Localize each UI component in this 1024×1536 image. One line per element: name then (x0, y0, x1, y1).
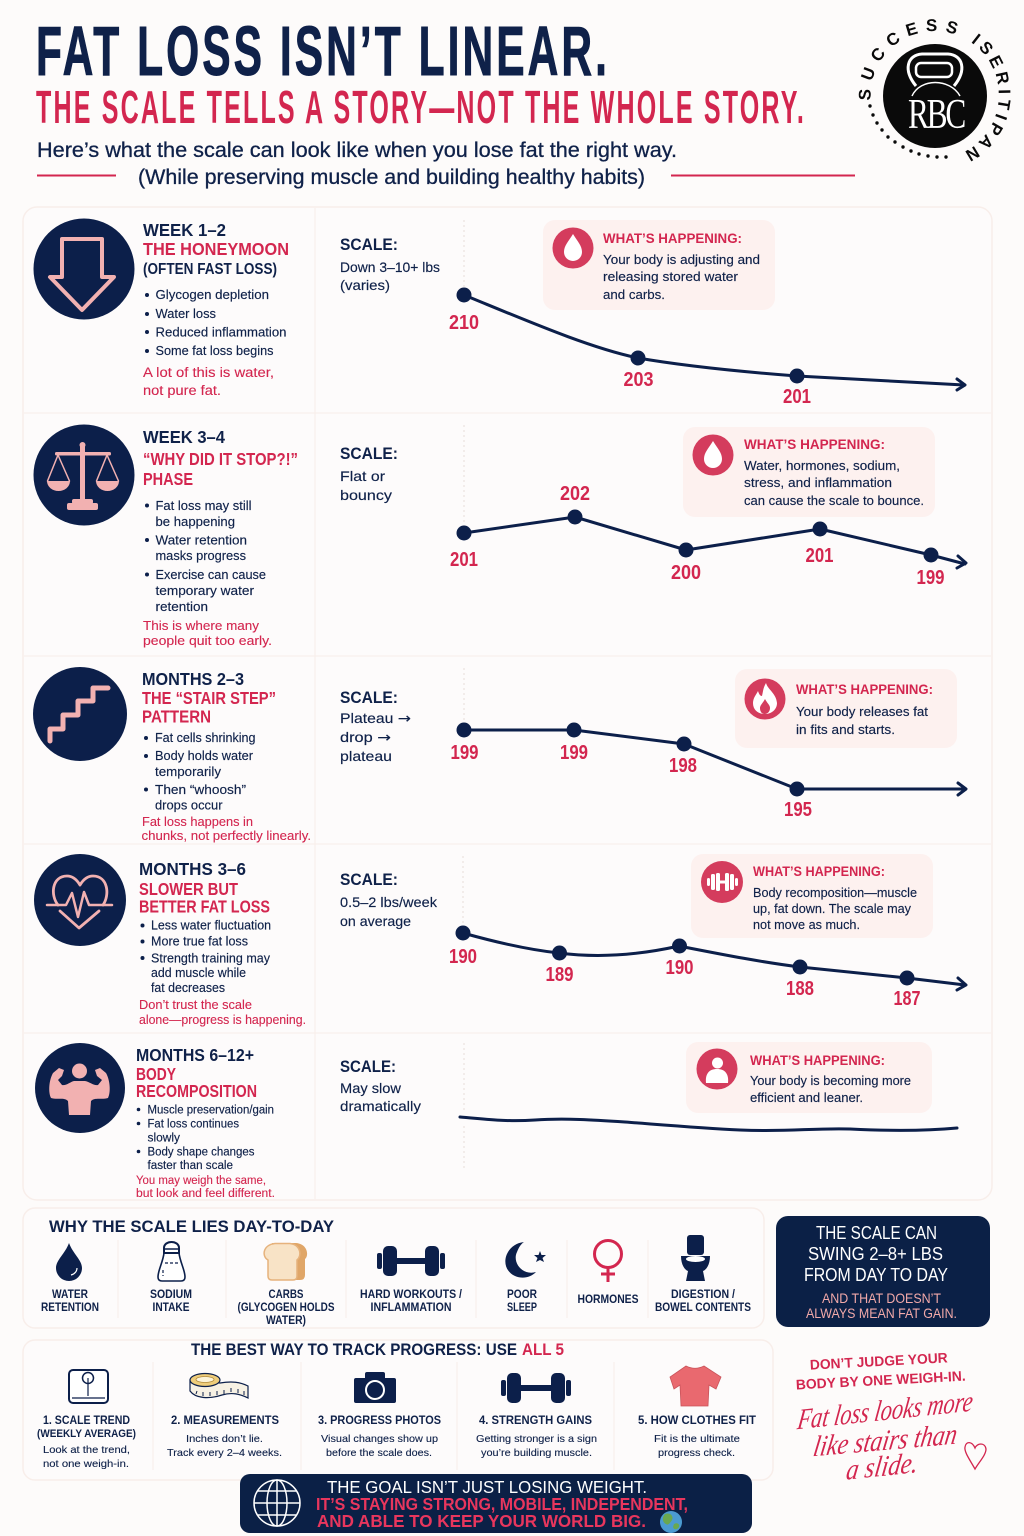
week 3-4 note: people quit too early. (143, 633, 272, 648)
months 6-12 bullets: slowly (148, 1132, 180, 1144)
item: measurements: Inches don’t lie. (186, 1433, 263, 1445)
scale label (340, 236, 440, 293)
item: scale trend (37, 1370, 136, 1470)
week 3-4 bullets: masks progress (156, 548, 246, 563)
item: scale trend: 1. SCALE TREND (43, 1415, 130, 1427)
months 3-6 note (139, 998, 306, 1027)
months 2-3 note: chunks, not perfectly linearly. (142, 829, 311, 843)
week 3-4 bullets (145, 498, 266, 614)
months 6-12 bullets: Fat loss continues (148, 1118, 239, 1130)
line chart: 190 to 187: 190 (449, 946, 477, 968)
item: how clothes fit: Fit is the ultimate (654, 1433, 740, 1445)
item: poor sleep: POOR (507, 1289, 538, 1301)
scale label (340, 445, 398, 503)
week 3-4 bullets: Exercise can cause (156, 567, 266, 582)
line chart: stair step 199 to 195 (450, 668, 966, 821)
callout: what's happening 4: Body recomposition—muscle (753, 885, 917, 900)
item: measurements: Track every 2–4 weeks. (167, 1447, 282, 1459)
week 3-4 bullets: Fat loss may still (156, 498, 252, 513)
line chart: bouncing 201 to 199: 199 (916, 567, 944, 589)
week 3-4 note (143, 618, 272, 648)
item: water retention (41, 1243, 99, 1314)
callout: what's happening 3: WHAT’S HAPPENING: (796, 682, 933, 697)
week 3-4 bullets: retention (156, 599, 208, 614)
callout: scale swing box: SWING 2–8+ LBS (808, 1243, 943, 1264)
callout: scale swing box: THE SCALE CAN (816, 1222, 937, 1243)
months 3-6 bullets: fat decreases (151, 980, 225, 995)
item: scale trend: (WEEKLY AVERAGE) (37, 1428, 136, 1440)
callout: what's happening 4 (691, 854, 933, 938)
months 6-12 bullets: Muscle preservation/gain (148, 1104, 274, 1116)
scale label: plateau (340, 748, 392, 764)
heading: why the scale lies: WHY THE SCALE LIES DAY-TO-DAY (49, 1217, 335, 1236)
week 1-2 note (143, 365, 274, 398)
item: water retention: WATER (52, 1289, 89, 1301)
week 1-2 bullets: Some fat loss begins (156, 343, 274, 358)
banner text: IT’S STAYING STRONG, MOBILE, INDEPENDENT, (316, 1494, 688, 1514)
months 2-3 heading (142, 669, 276, 726)
line chart: 190 to 187: 190 (666, 957, 694, 979)
scale label: Down 3–10+ lbs (340, 259, 440, 275)
months 6-12 bullets (137, 1104, 274, 1172)
line chart: 210 to 201 (449, 220, 965, 408)
handwritten note: DON’T JUDGE YOUR (809, 1349, 948, 1373)
months 3-6 note: alone—progress is happening. (139, 1013, 306, 1027)
line chart: 190 to 187 (449, 856, 966, 1010)
week 3-4 heading: WEEK 3–4 (143, 427, 225, 447)
scale label: SCALE: (340, 871, 398, 889)
item: water retention: RETENTION (41, 1302, 99, 1314)
line chart: 210 to 201: 201 (783, 386, 811, 408)
item: sodium intake: SODIUM (150, 1289, 192, 1301)
item: digestion: DIGESTION / (671, 1289, 736, 1301)
callout: what's happening 1: Your body is adjusting and (603, 252, 760, 267)
months 6-12 bullets: Body shape changes (148, 1146, 255, 1158)
line chart: 190 to 187: 188 (786, 978, 814, 1000)
line chart: bouncing 201 to 199: 201 (450, 549, 478, 571)
handwritten note: BODY BY ONE WEIGH-IN. (795, 1368, 966, 1392)
scale label (340, 1058, 421, 1114)
panel: timeline card (23, 207, 992, 1200)
item: carbs: CARBS (268, 1289, 304, 1301)
callout: what's happening 4: not move as much. (753, 917, 860, 932)
item: digestion (655, 1235, 751, 1314)
months 3-6 bullets: Strength training may (151, 950, 270, 966)
callout: what's happening 1: WHAT’S HAPPENING: (603, 231, 742, 246)
callout: what's happening 3 (735, 669, 957, 748)
item: measurements (167, 1374, 282, 1459)
item: progress photos (318, 1372, 441, 1459)
scale label (340, 871, 438, 929)
week 3-4 note: This is where many (143, 618, 260, 633)
week 3-4 heading: PHASE (143, 469, 193, 489)
callout: what's happening 1: and carbs. (603, 287, 665, 302)
handwritten note (795, 1349, 975, 1487)
goal banner (240, 1474, 752, 1533)
item: hard workouts (360, 1246, 463, 1314)
callout: scale swing box: FROM DAY TO DAY (804, 1264, 948, 1285)
handwritten note: a slide. (844, 1447, 920, 1487)
months 2-3 bullets: Fat cells shrinking (155, 730, 256, 745)
item: strength gains (476, 1373, 597, 1459)
week 1-2 bullets: Reduced inflammation (156, 324, 286, 340)
scale label: on average (340, 913, 411, 929)
week 1-2 note: A lot of this is water, (143, 365, 274, 380)
line chart: stair step 199 to 195: 195 (784, 799, 812, 821)
panel: week 1-2 (34, 218, 965, 408)
line chart: stair step 199 to 195: 199 (560, 742, 588, 764)
callout: what's happening 2: WHAT’S HAPPENING: (744, 437, 885, 452)
callout: what's happening 1 (543, 220, 775, 310)
item: digestion: BOWEL CONTENTS (655, 1302, 751, 1314)
icon: down arrow (34, 218, 134, 320)
panel: months 6-12+ (35, 1042, 957, 1200)
scale label: 0.5–2 lbs/week (340, 894, 438, 910)
item: carbs: (GLYCOGEN HOLDS (238, 1302, 335, 1314)
callout: what's happening 2: can cause the scale to bounce. (744, 493, 924, 508)
icon: stairs (33, 667, 127, 761)
item: how clothes fit: 5. HOW CLOTHES FIT (638, 1415, 756, 1427)
panel: why the scale lies (23, 1208, 764, 1328)
week 3-4 bullets: temporary water (156, 583, 255, 598)
scale label: bouncy (340, 487, 392, 503)
scale label: (varies) (340, 277, 390, 293)
line chart: 210 to 201: 203 (624, 369, 654, 391)
months 6-12 heading: BODY (136, 1064, 176, 1084)
scale label: SCALE: (340, 1058, 396, 1076)
week 1-2 heading (143, 220, 289, 278)
handwritten note: Fat loss looks more (795, 1386, 975, 1436)
item: how clothes fit (638, 1366, 756, 1459)
months 2-3 bullets: Body holds water (155, 748, 254, 763)
scale label: dramatically (340, 1098, 421, 1114)
line chart: gentle flat wave (460, 1043, 957, 1168)
months 6-12 heading: MONTHS 6–12+ (136, 1045, 254, 1065)
icon: heart with pulse (34, 854, 126, 946)
icon: earth (660, 1511, 682, 1533)
months 6-12 note: You may weigh the same, (136, 1175, 266, 1187)
item: carbs (238, 1243, 335, 1327)
scale label (340, 689, 411, 764)
item: progress photos: 3. PROGRESS PHOTOS (318, 1415, 441, 1427)
months 2-3 bullets: Then “whoosh” (155, 782, 246, 797)
item: sodium intake: INTAKE (152, 1302, 190, 1314)
item: measurements: 2. MEASUREMENTS (171, 1415, 279, 1427)
logo: RBC kettlebell badge: ISERITIPAN (965, 34, 1011, 162)
panel: months 2-3 (33, 667, 966, 843)
item: poor sleep (505, 1242, 546, 1314)
week 1-2 bullets (145, 287, 286, 358)
months 2-3 bullets: drops occur (155, 798, 223, 812)
callout: what's happening 3: in fits and starts. (796, 722, 895, 737)
item: carbs: WATER) (266, 1315, 306, 1327)
months 2-3 heading: THE “STAIR STEP” (142, 688, 276, 708)
week 3-4 heading (143, 427, 298, 489)
week 1-2 note: not pure fat. (143, 383, 221, 398)
item: strength gains: 4. STRENGTH GAINS (479, 1415, 592, 1427)
callout: what's happening 5: Your body is becoming more (750, 1073, 911, 1088)
item: hard workouts: HARD WORKOUTS / (360, 1289, 463, 1301)
callout: what's happening 2: Water, hormones, sodium, (744, 458, 900, 473)
banner text: THE GOAL ISN’T JUST LOSING WEIGHT. (327, 1477, 647, 1497)
intro text (37, 139, 855, 189)
line chart: 190 to 187: 187 (894, 988, 920, 1010)
line chart: 210 to 201: 210 (449, 312, 479, 334)
callout: scale swing box: ALWAYS MEAN FAT GAIN. (806, 1305, 957, 1321)
logo: RBC kettlebell badge (858, 19, 1011, 162)
months 2-3 note (142, 815, 311, 843)
callout: what's happening 4: up, fat down. The scale may (753, 901, 911, 916)
months 3-6 heading: BETTER FAT LOSS (139, 896, 270, 916)
week 3-4 bullets: be happening (156, 514, 235, 529)
heading: track progress: ALL 5 (522, 1340, 564, 1359)
months 3-6 heading: MONTHS 3–6 (139, 859, 246, 879)
months 3-6 heading (139, 859, 270, 916)
item: hormones (578, 1240, 639, 1306)
months 3-6 bullets: More true fat loss (151, 934, 248, 948)
week 1-2 heading: THE HONEYMOON (143, 239, 289, 259)
panel: months 3-6 (34, 854, 966, 1027)
line chart: stair step 199 to 195: 198 (669, 755, 697, 777)
line chart: stair step 199 to 195: 199 (450, 742, 478, 764)
callout: what's happening 5 (686, 1042, 932, 1113)
item: hard workouts: INFLAMMATION (370, 1302, 452, 1314)
months 6-12 bullets: faster than scale (148, 1160, 233, 1172)
months 2-3 bullets: temporarily (155, 764, 222, 779)
scale label: SCALE: (340, 689, 398, 707)
callout: what's happening 4: WHAT’S HAPPENING: (753, 864, 885, 879)
months 3-6 bullets: Less water fluctuation (151, 918, 271, 932)
line chart: 190 to 187: 189 (546, 964, 574, 986)
icon: balance scale (34, 424, 134, 526)
panel: best way to track progress (23, 1340, 773, 1480)
callout: what's happening 2: stress, and inflammation (744, 475, 892, 490)
callout: what's happening 1: releasing stored water (603, 269, 739, 284)
months 3-6 bullets: add muscle while (151, 965, 246, 980)
scale label: SCALE: (340, 445, 398, 463)
item: scale trend: Look at the trend, (43, 1444, 130, 1456)
week 1-2 bullets: Water loss (156, 306, 216, 321)
months 3-6 note: Don’t trust the scale (139, 998, 252, 1012)
line chart: bouncing 201 to 199: 200 (671, 562, 701, 584)
months 6-12 note (136, 1175, 275, 1200)
heading: track progress: THE BEST WAY TO TRACK PROGRESS: USE (191, 1340, 517, 1359)
week 1-2 bullets: Glycogen depletion (156, 287, 269, 302)
item: progress photos: before the scale does. (326, 1447, 432, 1459)
handwritten note: like stairs than (811, 1419, 960, 1463)
callout: what's happening 5: efficient and leaner. (750, 1090, 863, 1105)
callout: scale swing box: AND THAT DOESN’T (822, 1290, 941, 1306)
item: hormones: HORMONES (578, 1294, 639, 1306)
months 6-12 note: but look and feel different. (136, 1188, 275, 1200)
callout: scale swing box (776, 1216, 990, 1327)
panel: week 3-4 (34, 424, 966, 648)
week 1-2 heading: (OFTEN FAST LOSS) (143, 261, 277, 278)
banner text (316, 1477, 688, 1531)
callout: what's happening 2 (683, 427, 935, 517)
months 2-3 heading: MONTHS 2–3 (142, 669, 244, 689)
intro text: Here’s what the scale can look like when you lose fat the right way. (37, 139, 677, 162)
months 3-6 bullets (140, 918, 271, 995)
week 3-4 bullets: Water retention (156, 532, 247, 548)
week 3-4 heading: “WHY DID IT STOP?!” (143, 449, 298, 469)
banner text: AND ABLE TO KEEP YOUR WORLD BIG. (317, 1511, 646, 1531)
callout: what's happening 3: Your body releases fat (796, 704, 928, 719)
line chart: bouncing 201 to 199: 201 (806, 545, 834, 567)
item: progress photos: Visual changes show up (321, 1433, 438, 1445)
item: strength gains: Getting stronger is a sign (476, 1433, 597, 1445)
scale label: Plateau → (340, 710, 411, 727)
months 2-3 bullets (144, 730, 256, 812)
item: sodium intake (150, 1242, 192, 1314)
scale label: May slow (340, 1080, 402, 1096)
months 6-12 heading (136, 1045, 257, 1101)
item: poor sleep: SLEEP (507, 1302, 537, 1314)
icon: globe (254, 1480, 300, 1526)
scale label: SCALE: (340, 236, 398, 254)
callout: what's happening 5: WHAT’S HAPPENING: (750, 1053, 885, 1068)
logo: RBC kettlebell badge: RBC (908, 92, 965, 138)
line chart: bouncing 201 to 199 (450, 425, 966, 589)
scale label: drop → (340, 729, 391, 746)
months 3-6 heading: SLOWER BUT (139, 879, 238, 899)
week 1-2 heading: WEEK 1–2 (143, 220, 226, 240)
months 2-3 note: Fat loss happens in (142, 815, 253, 829)
scale label: Flat or (340, 468, 385, 484)
item: scale trend: not one weigh-in. (43, 1458, 129, 1470)
item: strength gains: you’re building muscle. (481, 1447, 592, 1459)
icon: heart outline (965, 1443, 986, 1469)
line chart: bouncing 201 to 199: 202 (560, 483, 590, 505)
intro text: (While preserving muscle and building healthy habits) (138, 166, 645, 189)
logo: RBC kettlebell badge: SUCCESS (858, 19, 958, 100)
icon: flexing figure (35, 1043, 125, 1133)
title: FAT LOSS ISN’T LINEAR. (36, 12, 610, 90)
item: how clothes fit: progress check. (658, 1447, 735, 1459)
months 2-3 heading: PATTERN (142, 706, 211, 726)
months 6-12 heading: RECOMPOSITION (136, 1081, 257, 1101)
